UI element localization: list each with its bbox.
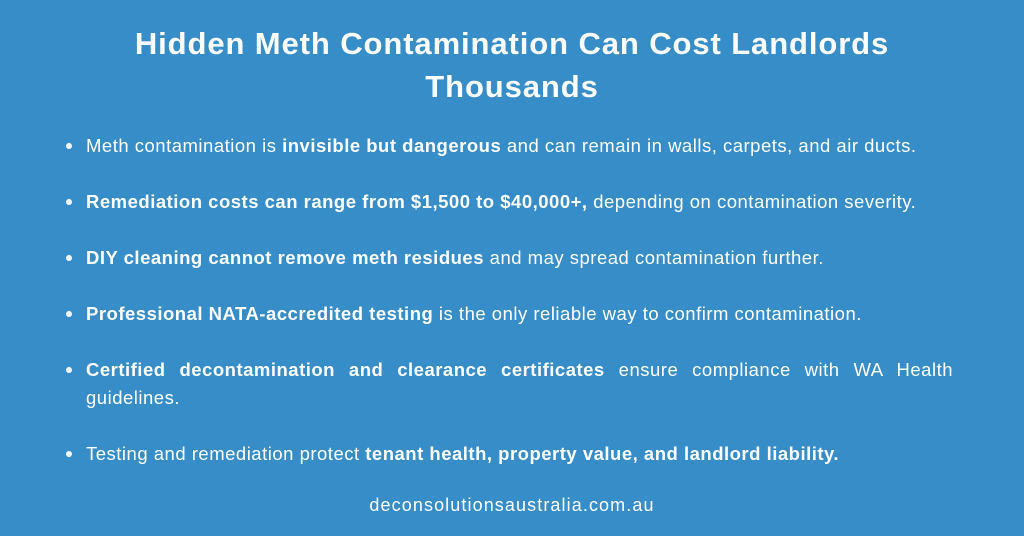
bullet 3: DIY cleaning cannot remove meth residues and may spread contamination further. (86, 247, 824, 268)
title: Hidden Meth Contamination Can Cost Landlords (135, 26, 889, 61)
title: Thousands (425, 69, 599, 104)
title (135, 26, 889, 104)
bullet 2: Remediation costs can range from $1,500 to $40,000+, depending on contamination severity. (86, 191, 916, 212)
footer url: deconsolutionsaustralia.com.au (369, 495, 655, 515)
bullet 4: Professional NATA-accredited testing is the only reliable way to confirm contamination. (86, 303, 862, 324)
bullet 6: Testing and remediation protect tenant health, property value, and landlord liability. (86, 443, 839, 464)
bullet 5: Certified decontamination and clearance certificates ensure compliance with WA Health guidelines. (86, 359, 953, 408)
bullet 1: Meth contamination is invisible but dangerous and can remain in walls, carpets, and air ducts. (86, 135, 916, 156)
